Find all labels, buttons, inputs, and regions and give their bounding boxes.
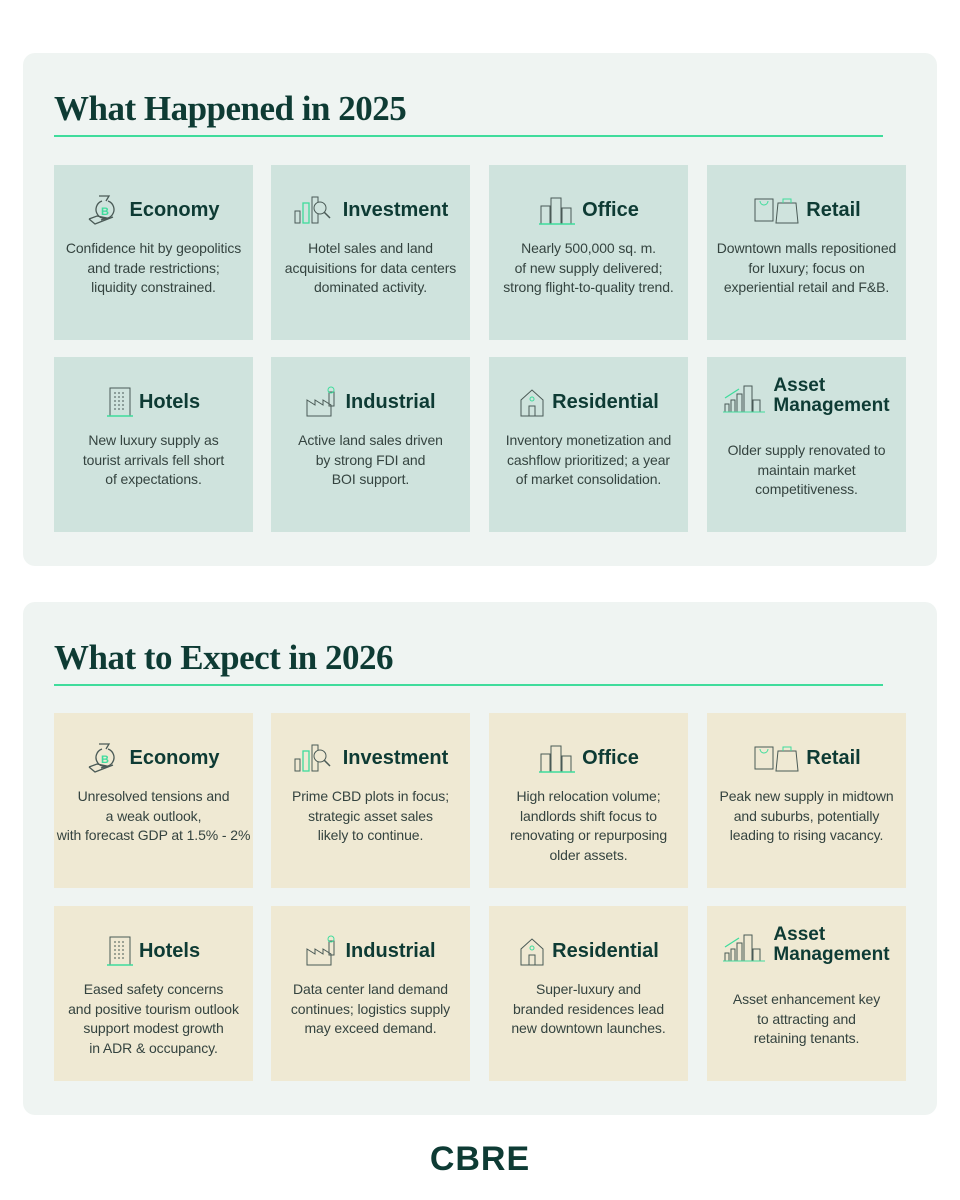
card: economy 2025: Confidence hit by geopolitics xyxy=(66,240,241,256)
card: residential 2025 xyxy=(489,357,688,532)
card: office 2025: of new supply delivered; xyxy=(515,260,662,276)
card: residential 2025: cashflow prioritized; a year xyxy=(507,452,670,468)
card: hotels 2026: and positive tourism outlook xyxy=(68,1000,239,1016)
card: economy 2025: liquidity constrained. xyxy=(91,279,216,295)
card: retail 2026 xyxy=(707,713,906,888)
card: office 2025 xyxy=(489,165,688,340)
card: office 2026: renovating or repurposing xyxy=(510,827,667,843)
card: investment 2025: dominated activity. xyxy=(314,279,427,295)
card: office 2026 xyxy=(489,713,688,888)
card: industrial 2026: Industrial xyxy=(345,940,436,962)
card: economy 2026: a weak outlook, xyxy=(106,808,201,824)
card: asset management 2026: Management xyxy=(773,944,890,965)
card: investment 2025: Investment xyxy=(343,198,448,220)
card: hotels 2026: support modest growth xyxy=(83,1020,224,1036)
card: investment 2026: Prime CBD plots in focus; xyxy=(292,788,449,804)
card: hotels 2026 xyxy=(54,906,253,1081)
card: economy 2026: with forecast GDP at 1.5% - 2% xyxy=(57,827,250,843)
card: retail 2026: leading to rising vacancy. xyxy=(730,827,883,843)
title: What Happened in 2025: What Happened in 2025 xyxy=(54,89,406,128)
card: retail 2025: Downtown malls repositioned xyxy=(717,240,896,256)
card: hotels 2025: New luxury supply as xyxy=(88,432,219,448)
card: industrial 2026: may exceed demand. xyxy=(304,1020,437,1036)
card: investment 2025 xyxy=(271,165,470,340)
panel: what happened in 2025 xyxy=(23,53,937,566)
card: hotels 2025 xyxy=(54,357,253,532)
card: industrial 2025: Active land sales driven xyxy=(298,432,443,448)
title: What to Expect in 2026: What to Expect in 2026 xyxy=(54,638,393,677)
card: asset management 2025: Asset xyxy=(773,375,825,396)
card: residential 2025: Inventory monetization and xyxy=(506,432,671,448)
card: industrial 2025: Industrial xyxy=(345,390,436,412)
card: retail 2025: for luxury; focus on xyxy=(748,260,865,276)
card: economy 2026: Unresolved tensions and xyxy=(78,788,229,804)
card: economy 2025 xyxy=(54,165,253,340)
card: asset management 2026: Asset enhancement key xyxy=(733,991,880,1007)
card: asset management 2026: to attracting and xyxy=(757,1010,856,1026)
card: office 2026: older assets. xyxy=(549,846,628,862)
card: investment 2026: strategic asset sales xyxy=(308,808,433,824)
card: investment 2026 xyxy=(271,713,470,888)
card: hotels 2026: in ADR & occupancy. xyxy=(89,1040,218,1056)
card: retail 2026: Peak new supply in midtown xyxy=(719,788,894,804)
card: retail 2026: Retail xyxy=(806,746,861,768)
card: office 2026: Office xyxy=(582,746,639,768)
card: economy 2025: Economy xyxy=(129,198,220,220)
card: residential 2025: Residential xyxy=(552,390,659,412)
card: asset management 2025: Older supply renovated to xyxy=(728,442,885,458)
card: investment 2026: Investment xyxy=(343,746,448,768)
card: hotels 2025: of expectations. xyxy=(105,471,202,487)
card: hotels 2025: tourist arrivals fell short xyxy=(83,452,224,468)
card: economy 2026 xyxy=(54,713,253,888)
card: office 2026: High relocation volume; xyxy=(516,788,660,804)
card: asset management 2026 xyxy=(707,906,906,1081)
card: asset management 2026: Asset xyxy=(773,924,825,945)
card: economy 2025: and trade restrictions; xyxy=(87,260,220,276)
card: economy 2025: B xyxy=(101,206,109,218)
card: retail 2025 xyxy=(707,165,906,340)
card: industrial 2025 xyxy=(271,357,470,532)
card: retail 2025: Retail xyxy=(806,198,861,220)
card: asset management 2026: retaining tenants. xyxy=(754,1030,859,1046)
card: office 2025: Nearly 500,000 sq. m. xyxy=(521,240,656,256)
card: retail 2025: experiential retail and F&B. xyxy=(724,279,889,295)
card: hotels 2026: Eased safety concerns xyxy=(84,981,223,997)
card: investment 2025: Hotel sales and land xyxy=(308,240,433,256)
card: asset management 2025: competitiveness. xyxy=(755,481,858,497)
card: office 2025: Office xyxy=(582,198,639,220)
card: hotels 2025: Hotels xyxy=(139,390,200,412)
card: residential 2026 xyxy=(489,906,688,1081)
card: hotels 2026: Hotels xyxy=(139,940,200,962)
card: industrial 2025: by strong FDI and xyxy=(316,452,425,468)
card: economy 2026: B xyxy=(101,754,109,766)
card: residential 2026: Residential xyxy=(552,940,659,962)
card: industrial 2025: BOI support. xyxy=(332,471,409,487)
card: economy 2026: Economy xyxy=(129,746,220,768)
card: residential 2026: new downtown launches. xyxy=(511,1020,666,1036)
card: asset management 2025 xyxy=(707,357,906,532)
card: residential 2025: of market consolidation. xyxy=(516,471,661,487)
card: industrial 2026: Data center land demand xyxy=(293,981,448,997)
logo: CBRE: CBRE xyxy=(430,1140,530,1178)
card: investment 2025: acquisitions for data centers xyxy=(285,260,456,276)
card: office 2025: strong flight-to-quality trend. xyxy=(503,279,674,295)
card: residential 2026: branded residences lead xyxy=(513,1000,664,1016)
card: office 2026: landlords shift focus to xyxy=(520,808,657,824)
panel: what to expect in 2026 xyxy=(23,602,937,1115)
card: residential 2026: Super-luxury and xyxy=(536,981,641,997)
card: industrial 2026 xyxy=(271,906,470,1081)
card: industrial 2026: continues; logistics supply xyxy=(291,1000,450,1016)
card: asset management 2025: Management xyxy=(773,395,890,416)
card: investment 2026: likely to continue. xyxy=(318,827,423,843)
card: retail 2026: and suburbs, potentially xyxy=(734,808,879,824)
card: asset management 2025: maintain market xyxy=(757,462,856,478)
